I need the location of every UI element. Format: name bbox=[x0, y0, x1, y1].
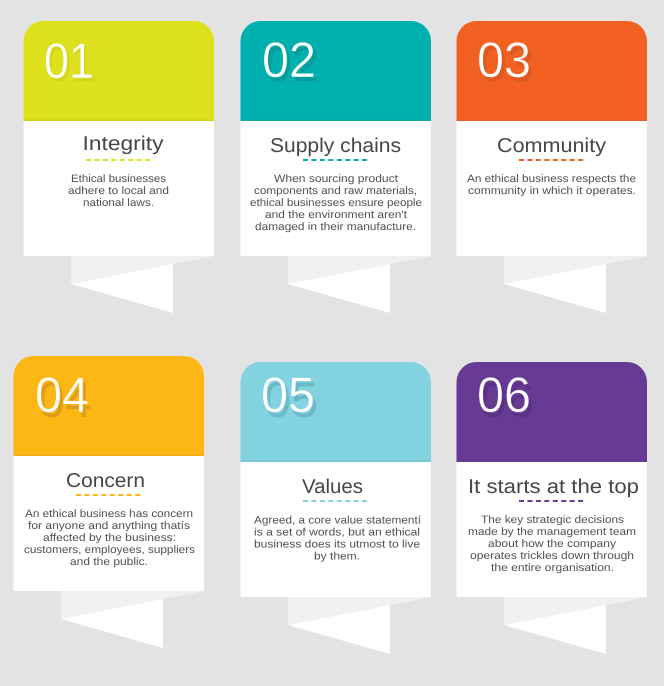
description bbox=[24, 508, 196, 568]
number: 03 bbox=[480, 36, 534, 92]
description: community in which it operates. bbox=[468, 185, 636, 197]
header band bbox=[240, 362, 431, 462]
description: about how the company bbox=[488, 538, 617, 550]
heading underline bbox=[519, 159, 584, 161]
description: by them. bbox=[314, 550, 360, 562]
description bbox=[467, 173, 636, 197]
description bbox=[254, 514, 421, 562]
heading underline bbox=[519, 500, 584, 502]
description: adhere to local and bbox=[68, 185, 169, 197]
number: 05 bbox=[264, 372, 318, 428]
heading: Integrity bbox=[82, 133, 164, 155]
description bbox=[250, 173, 422, 233]
description: affected by the business: bbox=[43, 532, 176, 544]
card body bbox=[240, 121, 431, 256]
description: operates trickles down through bbox=[470, 550, 634, 562]
number: 06 bbox=[477, 367, 531, 423]
description: damaged in their manufacture. bbox=[255, 221, 416, 233]
heading: Concern bbox=[66, 470, 145, 492]
panel: 05 Values bbox=[240, 362, 431, 654]
description: An ethical business has concern bbox=[25, 508, 193, 520]
header band bbox=[456, 21, 647, 121]
card body bbox=[240, 462, 431, 597]
description: made by the management team bbox=[468, 526, 636, 538]
header band bbox=[14, 356, 204, 456]
ribbon bbox=[71, 256, 214, 313]
description: ethical businesses ensure people bbox=[250, 197, 422, 209]
heading: Values bbox=[302, 476, 363, 498]
description: An ethical business respects the bbox=[467, 173, 636, 185]
number: 01 bbox=[44, 33, 94, 89]
heading: It starts at the top bbox=[468, 476, 639, 498]
description: components and raw materials, bbox=[254, 185, 417, 197]
panel: 06 It starts at the top bbox=[456, 362, 647, 654]
number: 01 bbox=[46, 36, 96, 92]
description: for anyone and anything thatís bbox=[28, 520, 191, 532]
description: and the public. bbox=[70, 556, 148, 568]
panel: 04 Concern bbox=[14, 356, 204, 648]
header band bbox=[24, 21, 214, 121]
ribbon bbox=[504, 597, 647, 654]
number: 05 bbox=[261, 367, 315, 423]
header band bbox=[240, 21, 431, 121]
number: 02 bbox=[265, 36, 319, 92]
description: The key strategic decisions bbox=[481, 514, 625, 526]
heading underline bbox=[76, 494, 141, 496]
ribbon bbox=[288, 256, 431, 313]
description: Ethical businesses bbox=[71, 173, 167, 185]
number: 02 bbox=[262, 32, 316, 88]
description: When sourcing product bbox=[274, 173, 398, 185]
card body bbox=[24, 121, 214, 256]
heading: Supply chains bbox=[270, 135, 401, 157]
heading underline bbox=[303, 500, 368, 502]
ribbon bbox=[288, 597, 431, 654]
number: 03 bbox=[477, 32, 531, 88]
card body bbox=[456, 462, 647, 597]
ribbon bbox=[61, 591, 204, 648]
description: and the environment aren't bbox=[265, 209, 407, 221]
card body bbox=[14, 456, 204, 591]
panel: 01 Integrity bbox=[24, 21, 214, 313]
number: 04 bbox=[38, 372, 92, 428]
description: the entire organisation. bbox=[491, 562, 614, 574]
description bbox=[68, 173, 169, 209]
description: national laws. bbox=[83, 197, 154, 209]
description: customers, employees, suppliers bbox=[24, 544, 196, 556]
number: 06 bbox=[480, 372, 534, 428]
heading: Community bbox=[497, 135, 606, 157]
panel: 03 Community bbox=[456, 21, 647, 313]
description: is a set of words, but an ethical bbox=[254, 526, 420, 538]
panel: 02 Supply chains bbox=[240, 21, 431, 313]
number: 04 bbox=[35, 367, 89, 423]
description bbox=[468, 514, 636, 574]
header band bbox=[456, 362, 647, 462]
ribbon bbox=[504, 256, 647, 313]
heading underline bbox=[86, 159, 151, 161]
description: business does its utmost to live bbox=[254, 538, 420, 550]
heading underline bbox=[303, 159, 368, 161]
card body bbox=[456, 121, 647, 256]
description: Agreed, a core value statementí bbox=[254, 514, 421, 526]
